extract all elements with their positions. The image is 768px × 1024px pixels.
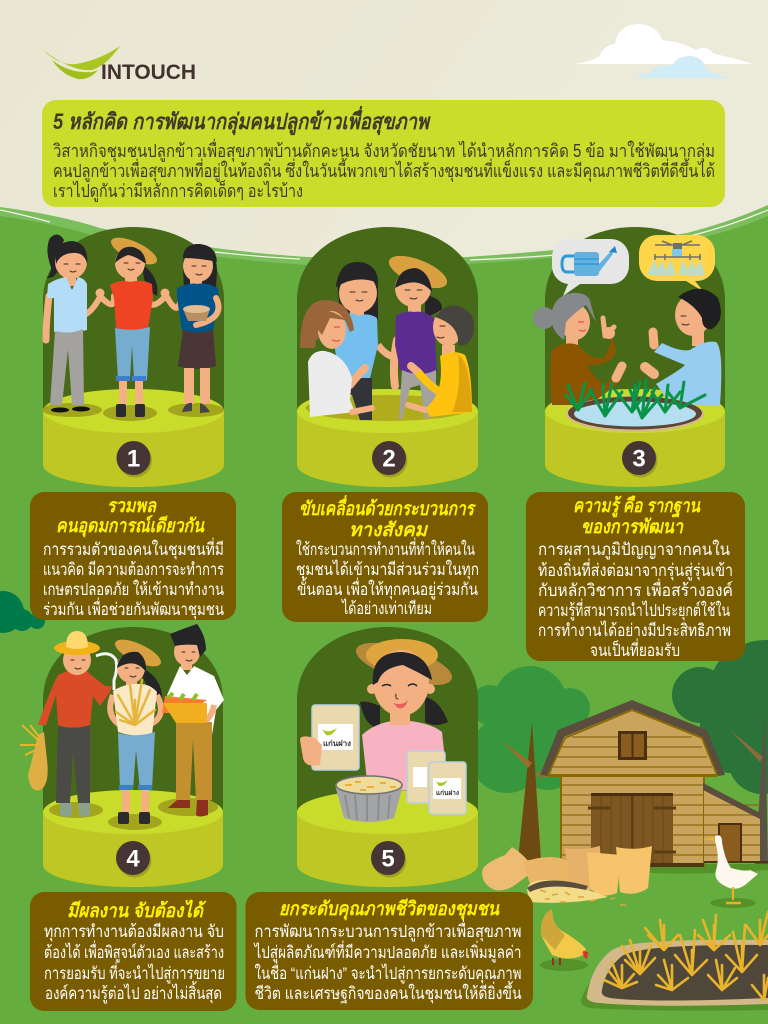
badge 4 — [116, 841, 152, 878]
intro text: เราไปดูกันว่ามีหลักการคิดเด็ดๆ อะไรบ้าง — [53, 179, 303, 202]
rice field — [581, 912, 768, 1011]
tree top overlapping box 3 — [745, 640, 768, 664]
badge 4: 4 — [126, 846, 140, 872]
panel 2: four villagers — [297, 227, 478, 487]
rice packs on table: แก่นฝาง — [436, 789, 460, 797]
badge 5 — [371, 841, 406, 878]
text box 4 — [30, 892, 236, 1011]
badge 2 — [372, 441, 408, 478]
logo: Intouch: INTOUCH — [101, 61, 196, 84]
text box 5: การพัฒนากระบวนการปลูกข้าวเพื่อสุขภาพ — [254, 919, 522, 942]
barn window — [618, 731, 647, 760]
text box 2: ทางสังคม — [349, 520, 428, 541]
speech bubble: watering can — [552, 239, 629, 296]
barn door — [588, 793, 676, 863]
text box 5 — [246, 892, 533, 1010]
woman winking — [352, 634, 456, 790]
woman in purple with hat — [385, 249, 451, 419]
speech bubble: drone — [639, 235, 715, 292]
text box 4: มีผลงาน จับต้องได้ — [67, 899, 207, 922]
text box 2: ขั้นตอน เพื่อให้ทุกคนอยู่ร่วมกัน — [297, 577, 478, 600]
text box 2: ขับเคลื่อนด้วยกระบวนการ — [299, 495, 476, 520]
text box 2 — [282, 492, 488, 622]
tree: left of barn — [469, 666, 590, 860]
text box 1: คนอุดมการณ์เดียวกัน — [56, 514, 205, 538]
goose — [703, 835, 758, 908]
text box 1: เกษตรปลอดภัย ให้เข้ามาทำงาน — [43, 579, 224, 599]
pond with rice seedlings — [566, 380, 705, 432]
young man — [645, 289, 721, 405]
woman with hat — [101, 232, 170, 417]
text box 3 — [526, 492, 745, 661]
text box 4: การยอมรับ ที่จะนำไปสู่การขยาย — [44, 961, 225, 984]
rice plants — [604, 912, 768, 1000]
barn shed — [703, 783, 768, 863]
panel 3: elder and youth talking — [533, 227, 725, 487]
badge 2: 2 — [382, 446, 396, 472]
green hill background — [0, 205, 768, 1024]
blue cloud — [633, 56, 728, 78]
text box 4: ต้องได้ เพื่อพิสูจน์ตัวเอง และสร้าง — [44, 940, 224, 963]
text box 4: ทุกการทำงานต้องมีผลงาน จับ — [44, 922, 224, 942]
pedestal 1 — [43, 389, 224, 487]
rice pack in hand: แก่นฝาง — [323, 739, 351, 748]
text box 2: ได้อย่างเท่าเทียม — [341, 598, 432, 618]
text box 3: ความรู้ คือ รากฐาน — [573, 495, 701, 518]
heading: 5 หลักคิด การพัฒนากลุ่มคนปลูกข้าวเพื่อสุขภาพ — [53, 105, 431, 136]
woman with basket — [167, 244, 219, 413]
man with sickle and sack — [20, 631, 112, 817]
intro text — [53, 138, 715, 202]
left edge bush — [0, 591, 45, 633]
chicken — [540, 909, 588, 971]
text box 4: องค์ความรู้ต่อไป อย่างไม่สิ้นสุด — [45, 981, 222, 1004]
badge 1: 1 — [127, 446, 140, 472]
spilled rice — [527, 880, 626, 905]
text box 1: แนวคิด มีความต้องการจะทำการ — [43, 560, 224, 579]
rice packs on table — [407, 751, 466, 814]
pedestal 3 — [545, 389, 725, 487]
text box 1: ร่วมกัน เพื่อช่วยกันพัฒนาชุมชน — [43, 597, 224, 620]
text box 3: การผสานภูมิปัญญาจากคนใน — [538, 539, 730, 560]
text box 5: ชีวิต และเศรษฐกิจของคนในชุมชนให้ดียิ่งขึ้น — [254, 981, 522, 1004]
pedestal 5 — [297, 790, 478, 887]
rice sacks — [482, 846, 652, 905]
badge 1 — [116, 441, 152, 478]
pedestal 4 — [43, 790, 223, 887]
text box 2: ชุมชนได้เข้ามามีส่วนร่วมในทุก — [296, 559, 479, 580]
text box 1: การรวมตัวของคนในชุมชนที่มี — [43, 537, 224, 560]
white cloud — [573, 24, 753, 64]
woman in white brown hair — [300, 300, 372, 417]
text box 3: ของการพัฒนา — [581, 517, 684, 538]
text box 5: ไปสู่ผลิตภัณฑ์ที่มีความปลอดภัย และเพิ่มมูลค่า — [253, 940, 522, 963]
badge 3: 3 — [632, 446, 646, 472]
man in yellow — [408, 305, 474, 417]
bowl of rice — [335, 776, 403, 822]
wheat bundle — [116, 680, 155, 725]
text box 3: จนเป็นที่ยอมรับ — [590, 638, 680, 660]
badge 3 — [622, 441, 658, 478]
woman left — [46, 234, 104, 412]
woman in blue — [335, 262, 396, 420]
logo: Intouch — [43, 46, 196, 84]
panel 5: woman with rice packs — [297, 627, 478, 887]
badge 5: 5 — [381, 846, 395, 872]
text box 5: ในชื่อ “แก่นฝาง” จะนำไปสู่การยกระดับคุณภาพ — [254, 961, 522, 984]
text box 3: กับหลักวิชาการ เพื่อสร้างองค์ — [538, 578, 733, 600]
barn — [540, 700, 768, 874]
pedestal 2 — [297, 389, 478, 487]
rice pack in hand — [300, 705, 359, 770]
woman with wheat — [110, 634, 164, 824]
text box 5: ยกระดับคุณภาพชีวิตของชุมชน — [279, 898, 500, 921]
basket — [183, 305, 210, 321]
text box 1: รวมพล — [107, 496, 157, 517]
text box 3: ท้องถิ่นที่ส่งต่อมาจากรุ่นสู่รุ่นเข้า — [538, 558, 733, 581]
sickle — [96, 654, 117, 690]
panel: intro box — [42, 100, 725, 207]
box of carrots — [162, 693, 207, 723]
panel 4: farmers with harvest — [20, 624, 224, 887]
text box 2: ใช้กระบวนการทำงานที่ทำให้คนใน — [296, 537, 475, 559]
grandmother — [533, 293, 622, 405]
text box 1 — [30, 492, 236, 620]
tree: right of barn — [672, 644, 768, 865]
panel 1: three women holding hands — [42, 227, 224, 487]
man with vegetable box — [162, 624, 224, 816]
